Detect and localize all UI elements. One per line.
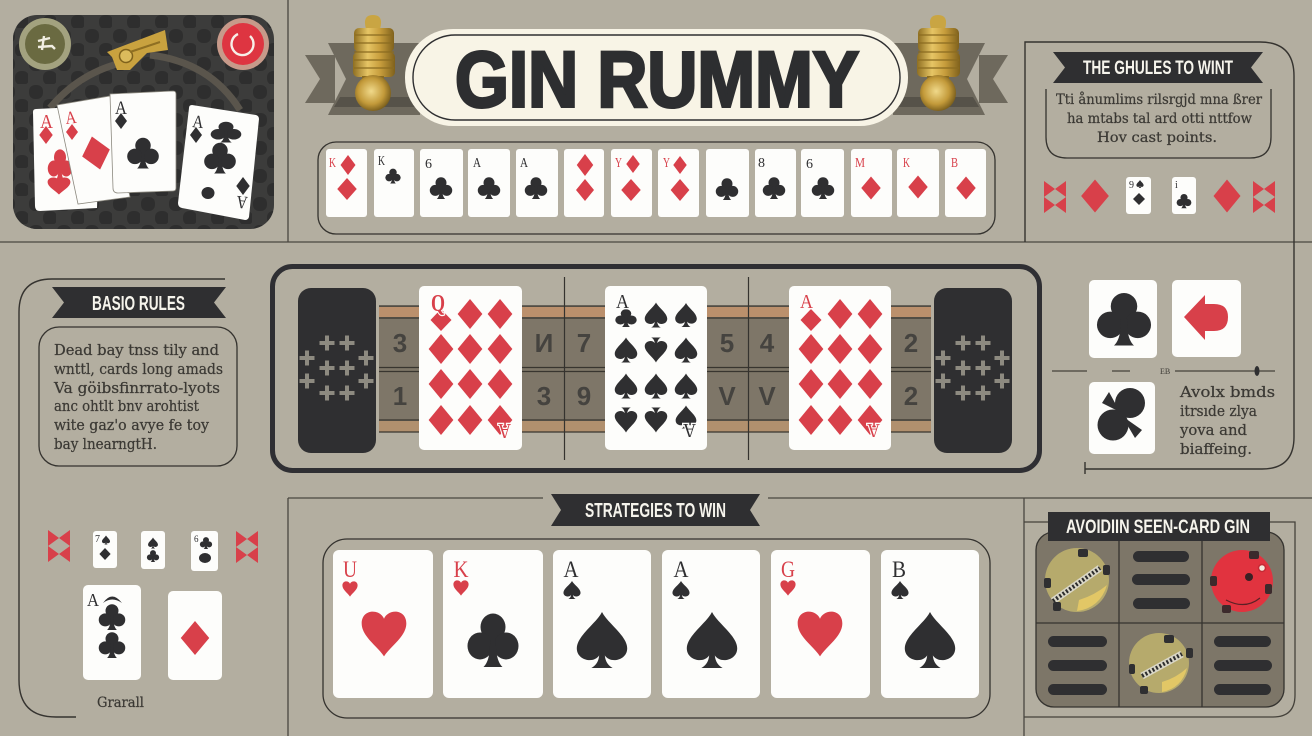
card: red ace left: A [40,111,53,133]
small icons row: 7 [95,534,100,545]
panel: basic rules [19,279,258,717]
small icons row: 6 [194,534,199,544]
text block: Hov cast points. [1097,130,1217,146]
card: club ace: A [115,98,127,119]
card row labels: Y [615,156,622,171]
card: B spades [881,550,979,698]
text block: yova and [1179,421,1247,439]
track numbers: И [535,328,553,358]
track numbers: 1 [393,381,407,411]
card row labels: Y [663,156,670,171]
panel: strategies to win [323,494,990,718]
track numbers: 2 [904,328,918,358]
track numbers: V [758,381,776,411]
bars [1048,551,1272,695]
card: ace of clubs [83,585,141,680]
card row labels: 8 [758,156,765,171]
title: GIN RUMMY [455,34,859,124]
heading banner [1053,52,1263,83]
track numbers: 7 [577,328,591,358]
card: A spades second: A [674,557,689,582]
panel: card row [318,142,995,234]
icon: gold clip [107,30,168,70]
heading banner [1048,512,1270,541]
text block: Avolx bmds [1179,383,1275,401]
ribbon: right [893,43,1008,115]
text block [39,327,237,466]
card: tilted club ace [178,105,259,220]
card: queen of diamonds [419,286,522,450]
card: queen of diamonds: Q [431,291,445,317]
icon: tan chip top [1044,548,1110,612]
card back: right [934,288,1012,453]
card: spades [605,286,707,450]
heading banner: THE GHULES TO WINT [1083,58,1233,79]
card row labels: K [378,154,385,169]
text block: biaffeing. [1180,440,1252,458]
card: ace of diamonds [789,286,891,450]
heading banner: BASIO RULES [92,293,185,315]
text block: anc ohtlt bnv arohtist [54,397,199,415]
card: diamond [168,591,222,680]
panel: bluffing tips [1052,280,1275,458]
track numbers [393,328,918,411]
card row labels: 6 [806,157,813,172]
card: G hearts: G [781,557,795,582]
panel: the rules to win [1025,42,1294,474]
card: A spades: A [564,557,579,582]
track numbers: 9 [577,381,591,411]
card: spades: A [616,291,629,313]
icon: left gold ornament [353,15,395,111]
panel: avoiding seen-card gin [1024,512,1295,717]
card: B spades: B [892,557,906,582]
track [379,277,931,460]
icon: red chip [1210,550,1273,613]
heading banner [551,494,760,526]
heading banner [52,287,226,318]
text block: bay lnearngtH. [54,435,157,453]
card: K clubs [443,550,543,698]
panel: card fan illustration [13,15,274,229]
card row labels: K [903,156,910,171]
ribbon: left [305,43,420,115]
text block [1179,383,1275,458]
card: queen of diamonds: A [497,419,511,443]
card row labels: 6 [425,157,432,172]
card: ace of diamonds: A [800,291,813,313]
icon: red chip [217,18,269,70]
track numbers: 3 [537,381,551,411]
card row labels: K [329,156,336,171]
card row labels [329,154,958,172]
card: tilted club ace: A [235,192,248,213]
icon: tan chip bottom [1129,633,1193,694]
card: rotated club [1089,382,1155,454]
card: A spades second [662,550,760,698]
small icons row [48,530,258,571]
grid [1036,532,1284,707]
title banner [305,15,1008,126]
text block [1046,89,1271,158]
card: red ace left [33,106,100,211]
card row labels: M [855,156,865,171]
heading banner: STRATEGIES TO WIN [585,500,726,522]
card row pips [337,154,976,201]
text block: Dead bay tnss tily and [54,341,219,359]
track numbers: 5 [720,328,734,358]
icon: right gold ornament [917,15,960,111]
card row labels: A [473,156,482,171]
card: club ace [110,91,176,193]
text block: wite gaz'o avye fe toy [54,416,209,434]
card: spades: A [683,419,696,441]
icons row [1044,177,1275,214]
text block: itrsıde zlya [1180,402,1257,420]
text block: Va göibsfinrrato-lyots [53,379,220,397]
label: Grarall [97,695,144,711]
card row cards [326,149,986,217]
divider with marker: EB [1160,367,1170,376]
track numbers: 4 [760,328,775,358]
text block: wnttl, cards long amads [54,360,223,378]
card: ace of clubs: A [87,590,99,610]
panel: game board [272,266,1040,470]
icon: olive chip [19,18,71,70]
text block: Tti ånumlims rilsrgjd mna ßrer [1056,91,1262,108]
card back: left [298,288,376,453]
card: red ace middle: A [64,107,77,128]
card: red arrow [1172,280,1241,357]
card: A spades [553,550,651,698]
card: K clubs: K [454,557,469,582]
card row labels: A [520,156,529,171]
track numbers: 2 [904,381,918,411]
text block: ha mtabs tal ard otti nttfow [1067,111,1252,127]
track numbers: V [718,381,736,411]
card: G hearts [771,550,870,698]
icons row: 9 [1129,180,1134,191]
card row labels: B [951,156,958,171]
title pill [405,29,908,126]
divider with marker [1052,366,1275,376]
card: ace of diamonds: A [867,419,880,441]
card: tilted club ace: A [192,111,205,132]
track numbers: 3 [393,328,407,358]
card: U hearts: U [343,557,357,582]
icons row: i [1175,180,1178,191]
card: club [1089,280,1157,358]
card: red ace middle [57,96,130,204]
heading banner: AVOIDIIN SEEN-CARD GIN [1066,517,1250,538]
card: U hearts [333,550,433,698]
